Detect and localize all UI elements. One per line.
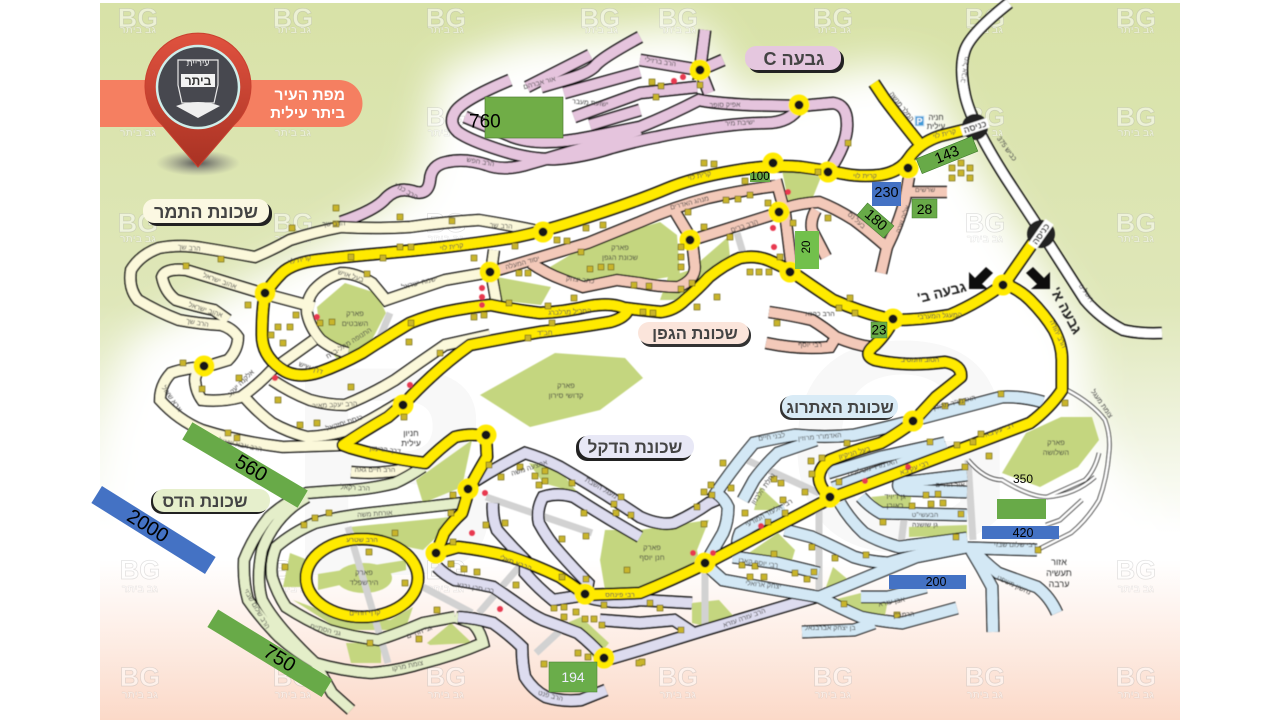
road names: הרב יעקב מאיר — [312, 401, 358, 410]
road names: צומת מרקו — [391, 660, 424, 673]
pill: Etrog: שכונת האתרוג — [786, 399, 894, 417]
watermarks: גב ביתר — [275, 234, 311, 245]
road names: רבי יוסף — [798, 342, 822, 349]
watermarks: BG — [813, 3, 853, 33]
watermarks: גב ביתר — [1118, 690, 1154, 701]
parking icon — [915, 113, 946, 131]
road names: ישועת מעבר — [572, 98, 609, 109]
road names: הרב ברים — [730, 219, 759, 234]
value 420 — [982, 526, 1059, 540]
road names: שרשים — [915, 187, 935, 194]
road names: קרית לוי — [853, 172, 877, 180]
road names: הרמב"ן — [893, 611, 915, 620]
gray roads — [348, 233, 973, 663]
value 200 — [889, 575, 966, 589]
watermarks: גב ביתר — [122, 584, 158, 595]
park names: פארק — [1047, 438, 1065, 447]
park names: קדושי סירון — [549, 391, 584, 400]
entrance: top: כניסה — [962, 119, 988, 135]
roads: Gefen — [491, 177, 947, 348]
main yellow roads — [262, 83, 1062, 617]
watermarks: BG — [273, 555, 313, 585]
area labels: עילית — [401, 438, 421, 448]
road names: המכיל מרלברג — [548, 307, 592, 317]
road names: גני החיים — [406, 625, 433, 640]
park names: פארק — [611, 243, 629, 252]
road names: אור החיים — [935, 482, 965, 489]
watermarks: גב ביתר — [967, 690, 1003, 701]
watermarks: גב ביתר — [660, 25, 696, 36]
road names: הרב שך — [489, 222, 513, 231]
watermarks: BG — [1116, 555, 1156, 585]
watermarks: גב ביתר — [120, 128, 156, 139]
value 2000: 2000 — [123, 505, 172, 547]
road names: קרית לוי — [287, 254, 312, 266]
data boxes — [91, 97, 1059, 697]
value 143: 143 — [932, 142, 962, 168]
road names: אמצעה משה — [510, 459, 549, 478]
pill: Etrog — [780, 395, 898, 420]
road names: הרב יהודה — [1048, 319, 1067, 350]
value 28 — [912, 199, 937, 218]
area labels: אזור — [1051, 557, 1067, 567]
area labels: חניון — [403, 428, 419, 438]
road names: הרב עזרה עזרא — [722, 608, 767, 630]
road names: אבא שאול — [160, 384, 184, 414]
map pin and title banner — [100, 33, 362, 176]
park names: פארק — [355, 568, 373, 577]
watermarks: גב ביתר — [122, 690, 158, 701]
pill: Dekel — [576, 435, 694, 461]
value 180 — [857, 203, 894, 238]
road names: הרב חפש — [466, 157, 495, 168]
value 750: 750 — [259, 641, 299, 677]
road names: מנהג האדרים — [669, 195, 710, 212]
area labels: ערבה — [1049, 579, 1069, 589]
road names: הרב שלום שבזי — [242, 588, 271, 630]
label: Givat B: גבעה ב' — [916, 278, 968, 306]
road names: אור אברהם — [523, 76, 557, 91]
road names: נחשון משפט — [996, 575, 1032, 597]
value 230: 230 — [874, 185, 899, 201]
watermarks: BG — [965, 662, 1005, 692]
park names: פארק — [557, 381, 575, 390]
pill: Dekel: שכונת הדקל — [588, 438, 683, 457]
watermarks: BG — [426, 3, 466, 33]
road names: בן יצחק אברבנאל — [804, 624, 856, 632]
park names: השבטים — [342, 319, 368, 328]
road names: הרב פנט — [537, 690, 564, 703]
park names: גן דיויד — [884, 492, 906, 501]
road names: הרב שטרע — [346, 537, 378, 544]
emblem — [157, 46, 239, 128]
road names: הבבא סאלי — [499, 554, 533, 573]
watermarks: BG — [965, 3, 1005, 33]
road names: בעל אויש — [337, 268, 365, 284]
road names: האדמו"ר מרוזין — [933, 395, 977, 412]
road names: דרך הרימון — [369, 445, 401, 456]
title banner: מפת העיר — [275, 87, 345, 104]
pill: Tamar — [143, 199, 272, 226]
watermarks: גב ביתר — [815, 25, 851, 36]
road names: דרך שיש — [298, 361, 324, 376]
watermarks: BG — [965, 102, 1005, 132]
watermarks: BG — [813, 662, 853, 692]
label: Givat A: גבעה א' — [1048, 285, 1085, 337]
area labels: תעשיה — [1046, 568, 1072, 578]
watermarks: גב ביתר — [275, 25, 311, 36]
value 760: 760 — [469, 112, 501, 132]
road names: אפיק סופר — [709, 102, 741, 109]
highway — [962, 3, 1162, 333]
pin — [145, 33, 251, 167]
watermarks: גב ביתר — [428, 584, 464, 595]
watermarks: BG — [120, 555, 160, 585]
watermarks: גב ביתר — [967, 25, 1003, 36]
watermarks: גב ביתר — [582, 25, 618, 36]
watermarks: גב ביתר — [1118, 234, 1154, 245]
watermarks: גב ביתר — [967, 128, 1003, 139]
value 180: 180 — [861, 207, 890, 234]
road names: מעגל השבת — [583, 476, 619, 501]
value 200: 200 — [926, 575, 946, 589]
road names: ירושלים — [1077, 282, 1097, 306]
watermarks: גב ביתר — [428, 690, 464, 701]
value 194 — [549, 662, 597, 692]
watermarks: BG — [273, 208, 313, 238]
park names: הירשפלד — [350, 578, 379, 587]
watermarks: BG — [1116, 3, 1156, 33]
pill: Tamar: שכונת התמר — [154, 202, 258, 222]
value 2000 — [91, 485, 216, 575]
entrance: lower: כניסה — [1030, 221, 1052, 247]
value 20: 20 — [801, 241, 813, 253]
watermarks: גב ביתר — [120, 25, 156, 36]
road names: אבן עזרא — [878, 596, 906, 609]
watermarks — [118, 3, 1156, 701]
parking icon: עילית — [927, 122, 946, 131]
value 750 — [207, 609, 333, 697]
watermarks: BG — [120, 662, 160, 692]
road names: כביש 375 — [995, 136, 1018, 163]
park names: ראובן — [886, 501, 904, 510]
watermarks: גב ביתר — [815, 690, 851, 701]
road names: ישיבת מיר — [725, 119, 755, 128]
title banner — [100, 80, 362, 127]
emblem: ביתר — [185, 74, 212, 88]
park names: פארק — [643, 543, 661, 552]
watermarks: גב ביתר — [275, 128, 311, 139]
road names: הרב שך — [177, 244, 201, 253]
roads: Dekel — [437, 453, 816, 701]
large faint logo: B — [285, 303, 502, 639]
value 20 — [795, 231, 819, 269]
road names: רבי אלעזר המודעי — [744, 497, 794, 529]
neighbourhood pills — [143, 46, 898, 514]
value 230 — [872, 182, 901, 206]
pin shadow — [156, 150, 240, 176]
road names: האדמו"ר מרוזין — [798, 432, 842, 443]
entrance: lower — [1021, 214, 1061, 254]
road names: רבי עקיבא — [984, 422, 1015, 439]
road names: אורחת משה — [357, 510, 393, 519]
road names: גן שושנה — [912, 522, 938, 529]
watermarks: BG — [273, 102, 313, 132]
roads: Etrog — [705, 397, 1057, 632]
road names: קרית לוי — [932, 127, 957, 141]
road names: בעל הניקיון — [838, 445, 871, 461]
watermarks: גב ביתר — [120, 234, 156, 245]
watermarks: גב ביתר — [1118, 584, 1154, 595]
road names: רבי סבן גרנא — [456, 582, 495, 595]
value 420: 420 — [1013, 526, 1033, 540]
watermarks: גב ביתר — [660, 690, 696, 701]
area labels — [401, 428, 1072, 589]
value 100: 100 — [750, 171, 770, 183]
value 143 — [916, 136, 978, 174]
value 560: 560 — [231, 451, 271, 487]
road names: יסוד המעלה — [504, 255, 541, 271]
road names: חב"ד — [537, 330, 553, 337]
road names: קרף החיים — [349, 609, 381, 618]
title banner: ביתר עילית — [270, 105, 345, 122]
park names: פארק — [346, 309, 364, 318]
road names: אהוב ישראל — [202, 271, 238, 291]
road names: האדמו"ר מסלונים — [847, 458, 898, 479]
road names: רבי יוסף קארו — [738, 557, 779, 570]
road names: הרב שך — [185, 318, 209, 329]
watermarks: BG — [273, 662, 313, 692]
watermarks: BG — [118, 102, 158, 132]
road names: אהוב ישראל — [188, 301, 224, 320]
road names: כנסת יחזקאל — [325, 413, 364, 433]
road names: הרב אבא שאול — [218, 437, 263, 454]
synagogue markers — [272, 74, 911, 612]
entrance: top — [958, 110, 992, 144]
road names: רבי עקיבא — [899, 460, 930, 477]
value 23: 23 — [871, 322, 887, 338]
emblem: עיריית — [186, 58, 210, 68]
road names: נחלת הלבנון — [750, 471, 777, 506]
value 28: 28 — [917, 201, 932, 217]
green box under 350 — [997, 499, 1046, 519]
road names: גני הסתיים — [309, 623, 342, 638]
road names: הטוב והמטיב — [901, 357, 939, 364]
road names: הרב כהנא — [805, 311, 835, 318]
watermarks: BG — [1116, 102, 1156, 132]
pill: Gefen — [638, 322, 751, 347]
place markers — [183, 82, 1065, 664]
roundabouts — [204, 70, 1003, 658]
roads: Givat C — [341, 30, 847, 222]
pill: Gefen: שכונת הגפן — [652, 325, 738, 343]
road names: יצחק ארואלי — [745, 579, 782, 591]
watermarks: גב ביתר — [1118, 128, 1154, 139]
roads: Tamar — [130, 220, 543, 473]
road names: כתר יצחק — [566, 276, 595, 286]
park names — [342, 243, 1069, 587]
road names: לבני חיים — [758, 431, 786, 443]
street map — [130, 3, 1162, 710]
watermarks: גב ביתר — [275, 690, 311, 701]
watermarks: גב ביתר — [1118, 25, 1154, 36]
road names: קרית לוי — [687, 170, 712, 182]
pill: Givat C — [745, 46, 844, 73]
value 560 — [182, 421, 308, 509]
watermarks: גב ביתר — [967, 234, 1003, 245]
road names: התנופה מתל-ברח — [325, 326, 373, 361]
road names: הרב כנדי — [393, 182, 419, 201]
road names: רבי שלום שבזי — [994, 541, 1036, 549]
watermarks: BG — [1116, 662, 1156, 692]
parks — [283, 170, 1099, 663]
park names: השלושה — [1043, 448, 1069, 457]
road names: בעל נס — [846, 210, 867, 231]
watermarks: BG — [426, 662, 466, 692]
road names: אלקנה יעקב — [225, 368, 256, 399]
arrow: Givat A — [1026, 267, 1050, 289]
watermarks: BG — [118, 3, 158, 33]
large faint logo: G — [785, 278, 1018, 614]
watermarks: BG — [965, 208, 1005, 238]
road names: צומת מעגל — [1089, 388, 1114, 420]
watermarks: גב ביתר — [428, 234, 464, 245]
road names: קרית לוי — [439, 241, 464, 253]
watermarks: גב ביתר — [428, 25, 464, 36]
road names: הרב שך — [322, 220, 346, 229]
watermarks: BG — [426, 102, 466, 132]
road names: הרב חיים גאה — [355, 467, 395, 474]
pill: Givat C: גבעה C — [763, 49, 825, 69]
road names: ישמח ישראל — [401, 275, 439, 291]
park names: חנן יוסף — [639, 553, 665, 562]
value 194: 194 — [561, 669, 585, 685]
arrow: Givat B — [969, 267, 993, 289]
watermarks: BG — [426, 555, 466, 585]
road names: הרב ברזילי — [644, 56, 677, 68]
watermarks: BG — [658, 3, 698, 33]
road names: הרב רקאל — [340, 483, 370, 493]
road names: רבי פינחס — [605, 592, 635, 599]
pill: Hadas: שכונת הדס — [162, 492, 248, 511]
park names: שכונת הגפן — [602, 253, 639, 262]
watermarks: גב ביתר — [275, 584, 311, 595]
roads: Hadas — [244, 467, 483, 710]
road names: המלך מנשה — [888, 90, 916, 123]
white ring roads — [968, 390, 1110, 550]
value 760 — [469, 97, 563, 138]
watermarks: BG — [273, 3, 313, 33]
road names: הבעשי"ט — [912, 512, 938, 519]
parking icon: P — [916, 116, 923, 126]
watermarks: BG — [426, 208, 466, 238]
pill: Hadas — [151, 489, 270, 514]
watermarks: BG — [1116, 208, 1156, 238]
parking icon: חניה — [928, 113, 944, 122]
road names: המעגל המערבי — [917, 311, 962, 321]
large faint logo — [285, 278, 1018, 639]
road names — [160, 56, 1114, 703]
watermarks: BG — [118, 208, 158, 238]
road names: חיל אביב — [959, 56, 971, 83]
watermarks: גב ביתר — [428, 128, 464, 139]
watermarks: BG — [658, 662, 698, 692]
watermarks: BG — [580, 3, 620, 33]
road names: אליה שרה — [894, 204, 912, 234]
value 350: 350 — [1013, 472, 1033, 486]
